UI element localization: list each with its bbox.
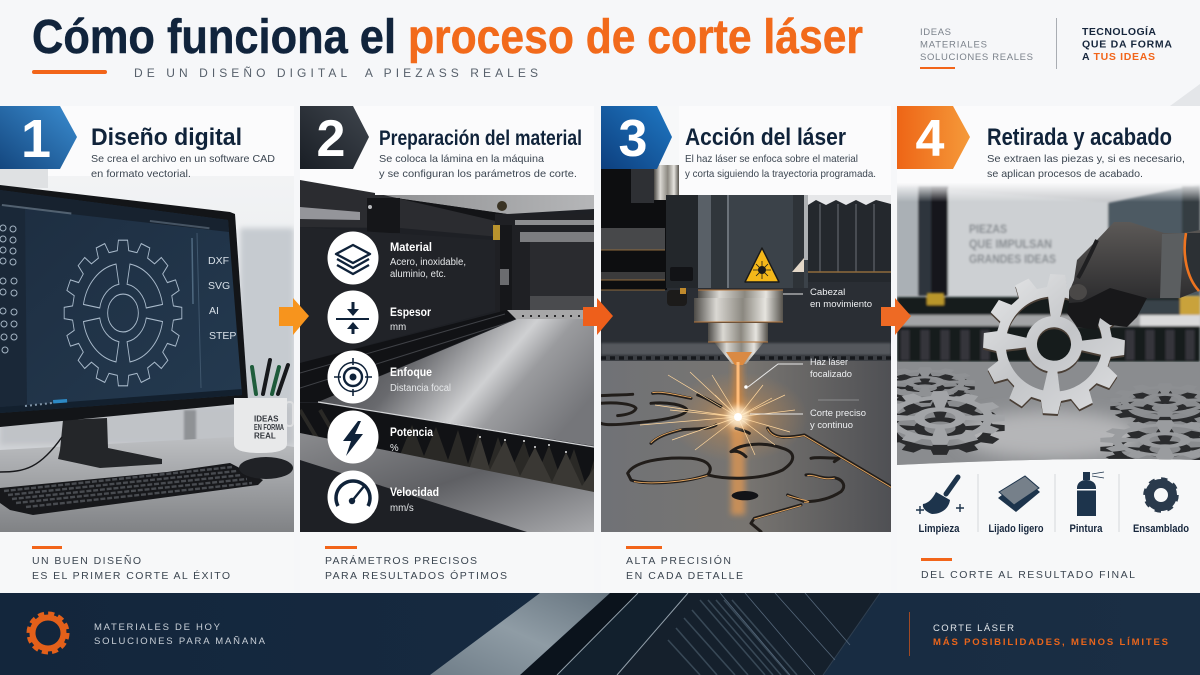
- metal sheet: [601, 358, 891, 532]
- footer left text: [94, 622, 266, 647]
- laser beam: [733, 362, 743, 418]
- callout: haz láser: focalizado: [810, 369, 852, 380]
- photo: laser machine bed: [300, 178, 594, 532]
- header: [32, 11, 1172, 80]
- gloved hand: [1067, 222, 1200, 330]
- panel 4 header gradient: [897, 182, 1200, 202]
- mug: [234, 398, 293, 453]
- icon: assembly gear: [1146, 480, 1176, 510]
- footer: [0, 593, 1200, 675]
- panel: step 4 retirada y acabado: [875, 106, 1200, 592]
- caption 3: [626, 546, 743, 582]
- heading 2: Preparación del material: [379, 127, 582, 150]
- label: velocidad: Velocidad: [390, 487, 439, 499]
- caption 2: [325, 546, 507, 582]
- machine ceiling: [375, 195, 594, 214]
- description 1: [91, 153, 275, 180]
- label: enfoque: Distancia focal: [390, 383, 451, 394]
- badge 1: 1: [21, 109, 51, 169]
- blurred wall sign: PIEZAS: [969, 222, 1007, 236]
- metal sheet: [318, 319, 594, 446]
- badge 4: 4: [916, 110, 945, 168]
- heading 1: Diseño digital: [91, 124, 242, 151]
- mug: EN FORMA: [254, 423, 284, 432]
- top right divider: [1056, 18, 1057, 69]
- blurred wall sign: GRANDES IDEAS: [969, 252, 1056, 266]
- callout: corte preciso: y continuo: [810, 420, 853, 431]
- footer right text: MÁS POSIBILIDADES, MENOS LÍMITES: [933, 637, 1168, 648]
- slats: [300, 403, 594, 482]
- callout: cabezal: [783, 287, 872, 310]
- top right tagline: [920, 27, 1033, 69]
- heading 3: Acción del láser: [685, 124, 846, 151]
- description 1: en formato vectorial.: [91, 168, 191, 180]
- panel: step 1 diseño digital: [0, 106, 294, 592]
- icon: speed gauge: [328, 470, 378, 524]
- icon: spray paint can: [1077, 472, 1104, 516]
- hole: [732, 491, 758, 500]
- icon: thickness: [328, 290, 378, 344]
- icon: sanding pad: [998, 476, 1040, 512]
- description 2: [379, 153, 577, 180]
- footer metal texture: [430, 593, 880, 675]
- photo: laser head cutting: [601, 165, 891, 532]
- top right tagline: MATERIALES: [920, 40, 987, 50]
- arrow: step 3 to 4: [881, 298, 911, 335]
- footer band: [0, 593, 1200, 675]
- panel 3 header backing: [679, 106, 891, 195]
- caption 4: DEL CORTE AL RESULTADO FINAL: [921, 569, 1135, 581]
- label: enfoque: [390, 367, 450, 391]
- small gears on table: [875, 367, 1200, 469]
- arrow: step 2 to 3: [583, 298, 613, 335]
- description 4: se aplican procesos de acabado.: [987, 168, 1143, 180]
- blurred wall sign: [969, 222, 1056, 266]
- title underline: [32, 70, 107, 74]
- mug: IDEAS: [254, 414, 279, 424]
- top right tagline: SOLUCIONES REALES: [920, 52, 1033, 63]
- arrow: step 1 to 2: [279, 298, 309, 335]
- caption 1: [32, 546, 230, 582]
- caption 2: PARÁMETROS PRECISOS: [325, 554, 477, 567]
- caption 1: ES EL PRIMER CORTE AL ÉXITO: [32, 569, 230, 582]
- description 3: El haz láser se enfoca sobre el material: [685, 153, 858, 165]
- cad gear drawing: [64, 240, 182, 386]
- top right slogan: [1082, 25, 1172, 63]
- top right slogan: QUE DA FORMA: [1082, 38, 1172, 50]
- panel: step 3 acción del láser: [601, 106, 891, 592]
- file format labels: DXF: [208, 255, 229, 267]
- main steel gear: [980, 273, 1128, 419]
- nozzle: [667, 288, 783, 365]
- badge 2: [300, 106, 369, 169]
- head block: [666, 195, 808, 288]
- badge 2: 2: [317, 110, 345, 168]
- top right slogan: TECNOLOGÍA: [1082, 25, 1156, 38]
- finishing processes: [916, 472, 1189, 535]
- cut contours: [601, 392, 891, 532]
- panel 2 card: [300, 106, 594, 592]
- icon: focus target: [328, 350, 378, 404]
- reflected glow: [668, 372, 808, 462]
- badge 3: [601, 106, 672, 169]
- title: [32, 11, 863, 64]
- callout: corte preciso: Corte preciso: [810, 408, 866, 419]
- label: potencia: Potencia: [390, 427, 434, 439]
- label: material: Material: [390, 242, 432, 254]
- rail: [300, 310, 517, 402]
- footer divider: [909, 612, 910, 656]
- alcove: [495, 214, 506, 225]
- panel: step 2 preparación del material: [300, 106, 594, 592]
- monitor stand: [58, 418, 162, 468]
- label: espesor: mm: [390, 322, 406, 333]
- label: material: aluminio, etc.: [390, 269, 446, 280]
- monitor: [0, 185, 248, 427]
- file format labels: [208, 255, 236, 342]
- callout: cabezal: Cabezal: [810, 287, 845, 298]
- label: ensamblado: Ensamblado: [1133, 523, 1189, 535]
- panel 1 header backing: [48, 106, 294, 176]
- callout: corte preciso: [750, 400, 866, 431]
- bellows: [808, 195, 891, 205]
- description 4: Se extraen las piezas y, si es necesario,: [987, 153, 1185, 165]
- blurred wall sign: QUE IMPULSAN: [969, 237, 1052, 251]
- icon: brush limpieza: [916, 477, 964, 514]
- laser warning sign: [745, 248, 779, 282]
- label: potencia: %: [390, 443, 399, 454]
- callout: cabezal: en movimiento: [810, 299, 872, 310]
- icon: material layers: [328, 232, 378, 284]
- description 2: y se configuran los parámetros de corte.: [379, 168, 577, 180]
- icon: power bolt: [328, 410, 378, 464]
- panel 1 card: [0, 106, 294, 592]
- lower slab: [300, 433, 594, 532]
- label: limpieza: Limpieza: [918, 523, 960, 535]
- keyboard: [0, 463, 263, 515]
- caption 4: [921, 558, 1135, 581]
- panel 3 card: [601, 106, 891, 592]
- caption 3: ALTA PRECISIÓN: [626, 554, 731, 567]
- top right slogan: A TUS IDEAS: [1082, 51, 1155, 63]
- label: velocidad: mm/s: [390, 503, 414, 514]
- label: espesor: Espesor: [390, 307, 431, 319]
- panel 4 header backing: [897, 106, 1200, 182]
- badge 4: [897, 106, 970, 169]
- label: material: [390, 242, 466, 280]
- corner accent: [1170, 84, 1200, 106]
- footer right text: CORTE LÁSER: [933, 623, 1014, 634]
- label: velocidad: [390, 487, 438, 511]
- caption 1: UN BUEN DISEÑO: [32, 554, 141, 567]
- description 3: [685, 153, 876, 180]
- mug: REAL: [254, 432, 276, 440]
- photo: finished gears: [875, 106, 1200, 470]
- footer left text: SOLUCIONES PARA MAÑANA: [94, 636, 266, 647]
- footer right text: [933, 623, 1168, 648]
- back wall: [367, 232, 386, 233]
- panel 4 card: [897, 106, 1200, 592]
- file format labels: STEP: [209, 330, 236, 342]
- title: Cómo funciona el: [32, 11, 396, 64]
- photo: workstation: [0, 169, 294, 532]
- description 4: [987, 153, 1185, 180]
- label: pintura: Pintura: [1070, 523, 1103, 535]
- mouse: [239, 457, 293, 479]
- callout: haz láser: [744, 357, 852, 389]
- sparks: [640, 372, 795, 455]
- back edge of the sheet: [507, 310, 583, 320]
- pens: [252, 360, 288, 394]
- process dividers: [978, 474, 1119, 532]
- footer left text: MATERIALES DE HOY: [94, 622, 221, 633]
- description 2: Se coloca la lámina en la máquina: [379, 153, 544, 165]
- badge 3: 3: [619, 110, 647, 168]
- chrome cylinder: [654, 165, 679, 200]
- label: potencia: [390, 427, 434, 451]
- panel 2 header backing: [300, 106, 594, 195]
- caption 3: EN CADA DETALLE: [626, 570, 743, 582]
- description 1: Se crea el archivo en un software CAD: [91, 153, 275, 165]
- description 3: y corta siguiendo la trayectoria programada.: [685, 168, 876, 180]
- badge 1: [0, 106, 77, 169]
- title: proceso de corte láser: [408, 11, 863, 64]
- top right tagline: IDEAS: [920, 27, 951, 38]
- caption 2: PARA RESULTADOS ÓPTIMOS: [325, 569, 507, 582]
- label: lijado ligero: Lijado ligero: [988, 523, 1044, 535]
- file format labels: SVG: [208, 280, 230, 292]
- gantry beam: [300, 180, 500, 237]
- subtitle: DE UN DISEÑO DIGITAL A PIEZASS REALES: [134, 66, 538, 80]
- label: espesor: [390, 308, 431, 330]
- callout: haz láser: Haz láser: [810, 357, 849, 368]
- file format labels: AI: [209, 305, 219, 317]
- label: enfoque: Enfoque: [390, 367, 432, 379]
- parameter list: [328, 232, 466, 524]
- footer gear logo: [29, 614, 67, 652]
- label: material: Acero, inoxidable,: [390, 257, 466, 268]
